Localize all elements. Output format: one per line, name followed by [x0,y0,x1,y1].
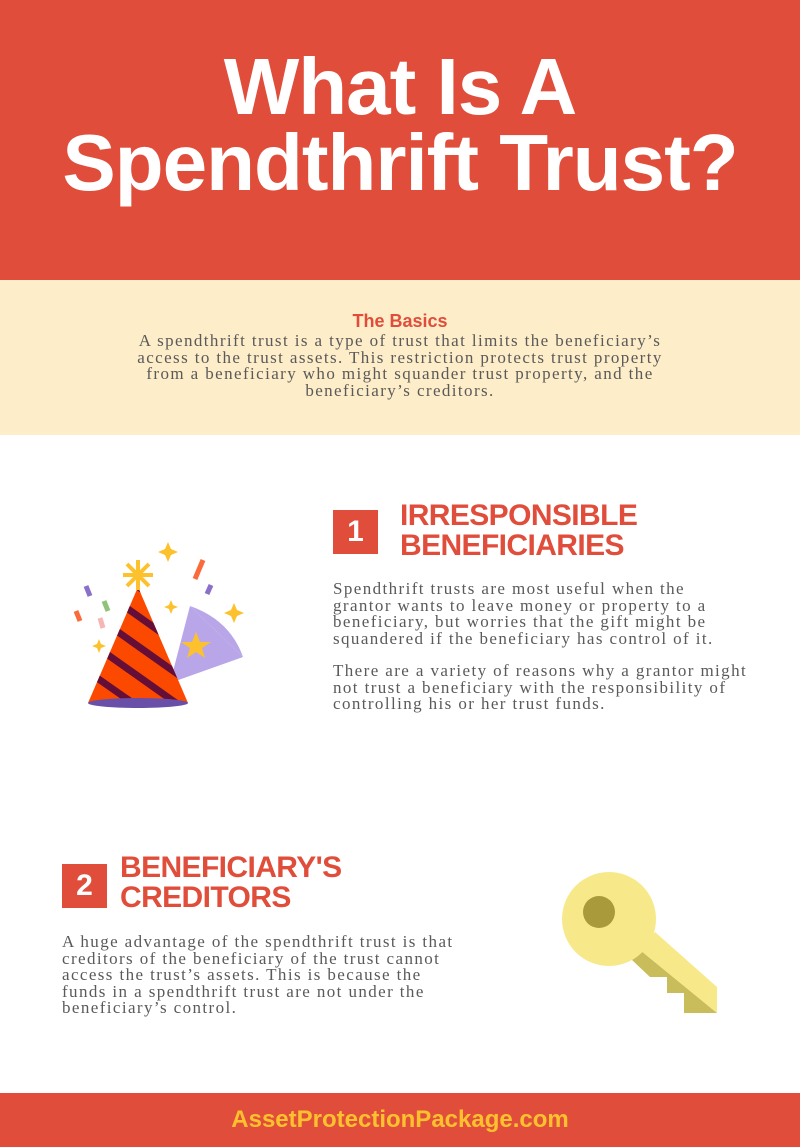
footer url: AssetProtectionPackage.com [231,1106,569,1133]
text 2: access the trust’s assets. This is because the [62,965,422,984]
text 1: grantor wants to leave money or property to a [333,596,707,614]
title: What Is A [224,42,576,131]
text 1: controlling his or her trust funds. [333,694,606,713]
icon: key [562,872,717,1013]
text 2: creditors of the beneficiary of the trust cannot [62,948,440,968]
basics heading: The Basics [352,311,448,331]
icon: party hat [74,542,244,708]
number badge 1: 1 [347,515,364,548]
text 1: not trust a beneficiary with the responsibility of [333,678,726,696]
text 1 [333,579,747,713]
basics text [137,331,663,400]
number badge 2: 2 [76,869,93,902]
text 2 [62,932,454,1017]
header banner [0,0,800,280]
section 2: beneficiary's creditors [62,851,454,1017]
title: Spendthrift Trust? [62,118,738,207]
heading 2: CREDITORS [120,881,291,914]
heading 2: BENEFICIARY'S [120,851,342,884]
section 1: irresponsible beneficiaries [333,499,747,713]
number badge 1 [333,510,378,554]
heading 1: BENEFICIARIES [400,529,624,562]
text 2: funds in a spendthrift trust are not under the [62,982,425,1000]
text 2: beneficiary’s control. [62,998,237,1017]
heading 2 [120,851,342,914]
panel: the basics [0,280,800,435]
text 2: A huge advantage of the spendthrift trust is that [62,932,454,951]
title [62,42,738,207]
text 1: squandered if the beneficiary has control of it. There are a variety of reasons why a grantor might [333,628,747,680]
text 1: beneficiary, but worries that the gift might be [333,612,706,631]
heading 1: IRRESPONSIBLE [400,499,637,532]
text 1: Spendthrift trusts are most useful when the [333,579,685,598]
basics text: beneficiary’s creditors. [305,380,495,400]
basics text: access to the trust assets. This restriction protects trust property [137,348,663,366]
footer [0,1093,800,1147]
basics text: A spendthrift trust is a type of trust that limits the beneficiary’s [139,331,661,350]
basics text: from a beneficiary who might squander trust property, and the [146,364,654,383]
number badge 2 [62,864,107,908]
heading 1 [400,499,637,562]
